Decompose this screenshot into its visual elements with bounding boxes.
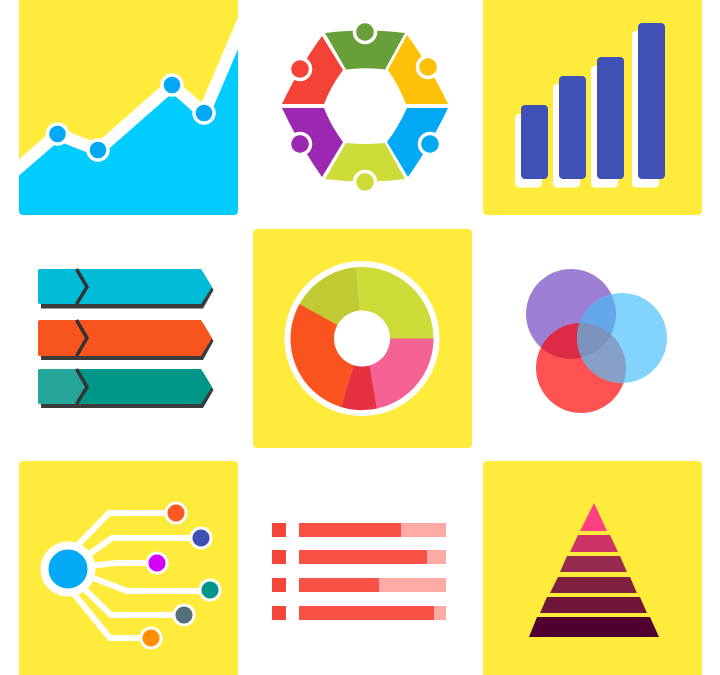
panel: hexagon people ring [282,22,448,192]
banner: cyan [38,269,214,308]
leaf nodes [141,503,220,648]
banner: teal [38,369,214,408]
slice: red [341,338,377,410]
panel: node network [19,461,238,675]
chart area fill [19,49,238,215]
donut ring [284,261,440,416]
overlap: purple and red [541,323,582,359]
head notches and heads [290,22,440,192]
slice: lime [356,267,434,338]
panel: arrow banners [38,269,214,408]
data points [48,75,214,160]
panel: bar chart [483,0,702,215]
segment: blue [387,108,448,177]
segment: purple [282,108,343,177]
segment: red [282,36,343,104]
row 4 [272,606,446,620]
slice: pink [365,338,434,408]
chart line [19,18,238,176]
panel: venn diagram [526,269,667,413]
row 1 [272,523,446,537]
connectors [65,513,210,638]
tier 3 [560,556,627,572]
donut hole [334,310,390,366]
circle: red [536,323,626,413]
bar shadows [515,31,659,188]
tier 5 [540,597,647,613]
circle: purple [526,269,616,359]
row 3 [272,578,446,592]
bars [521,23,665,179]
slice: olive [300,267,362,338]
panel: area line chart [19,0,238,215]
slice: orange [291,304,362,407]
tier 2 [570,535,618,552]
hub node [44,546,92,592]
banner: orange [38,320,214,360]
row 2 [272,550,446,564]
tier 1 [580,503,607,531]
circle: blue [577,293,667,383]
panel: pyramid [483,461,702,675]
overlap: red and blue [577,323,626,383]
tier 6 [529,617,659,637]
panel: donut chart [253,229,472,448]
overlap: purple and blue [577,294,616,358]
segment: green [325,30,405,70]
panel: progress list [272,523,446,620]
tier 4 [550,577,637,593]
segment: lime [325,143,405,182]
segment: amber [388,35,448,104]
overlap: all three [577,323,611,358]
